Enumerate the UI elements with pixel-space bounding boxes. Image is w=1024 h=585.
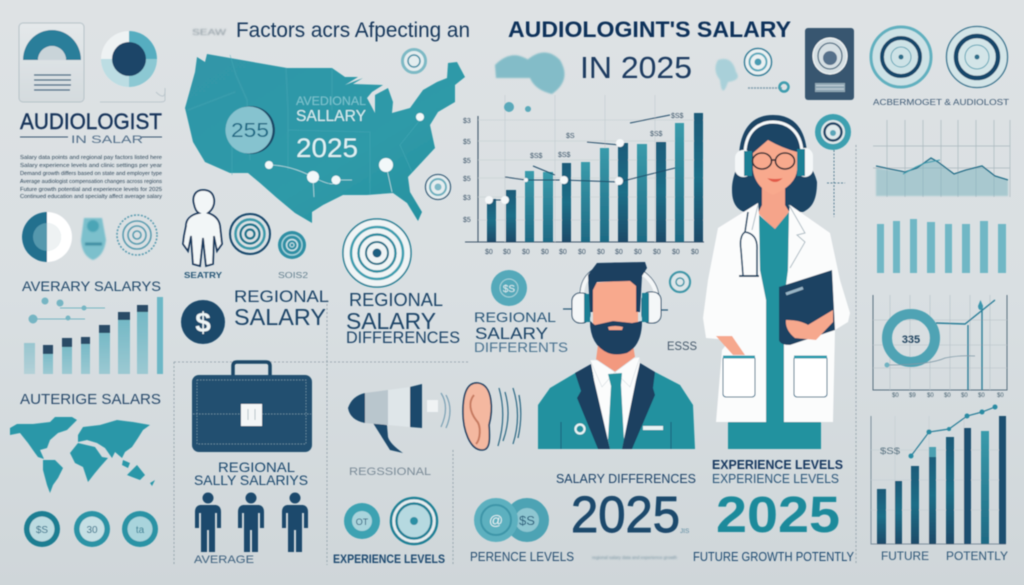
dotted panel dividers	[174, 145, 856, 565]
world map	[10, 417, 155, 493]
label: salary differences: SALARY DIFFERENCES	[556, 471, 696, 486]
bar chart: salary over time	[463, 95, 704, 256]
map circle: 255	[226, 106, 275, 154]
pockets	[723, 356, 827, 397]
label: average: AVERAGE	[194, 554, 254, 566]
lapels	[752, 205, 805, 268]
label: average salaries 2: AUTERIGE SALARS	[20, 391, 161, 408]
clipboard	[779, 270, 835, 345]
label: regional grey: REGSSIONAL	[349, 466, 431, 478]
axis labels: $0	[485, 249, 493, 256]
pocket square	[643, 426, 663, 430]
figure: female audiologist	[703, 115, 850, 449]
icon: small badge	[344, 503, 380, 539]
axis labels: $0	[615, 249, 623, 256]
label: seat: SEATRY	[184, 270, 222, 280]
forearm	[716, 336, 745, 355]
icon: ring with pin	[815, 114, 851, 217]
top blobs	[504, 102, 531, 112]
text block: body copy	[20, 155, 162, 200]
icon: megaphone	[348, 384, 450, 453]
axis labels: $3	[463, 195, 471, 202]
year: teal: 2025	[716, 486, 840, 543]
stethoscope	[739, 212, 759, 276]
axis labels: $5	[463, 217, 471, 224]
heading: regional salary differences: DIFFERENCES	[346, 328, 460, 347]
icon: faint blob	[715, 59, 738, 91]
icon: concentric target	[230, 214, 270, 254]
badge 1: $S	[36, 525, 48, 536]
glasses	[752, 153, 794, 169]
label: experience levels regular: EXPERIENCE LEVELS	[712, 471, 839, 486]
label: experience levels: EXPERIENCE LEVELS	[333, 552, 445, 566]
card: gauge	[19, 23, 84, 102]
icon: ring pair	[871, 26, 1008, 88]
axis labels: $0	[672, 249, 680, 256]
bar chart: future growth: $S$	[880, 446, 900, 456]
figure: male audiologist	[538, 262, 695, 449]
heading: regional salary: REGIONAL	[234, 287, 329, 306]
headset stems	[563, 309, 668, 310]
label: assessment audiologist: ACBERMOGET & AUDIOLOST	[873, 97, 1009, 107]
neck	[758, 188, 790, 230]
icon: donut dial	[100, 31, 165, 102]
label: potently: POTENTLY	[946, 549, 1008, 563]
title line 2: IN 2025	[580, 50, 692, 85]
year: dark: 2025	[571, 486, 680, 543]
chart with donut: $0	[961, 393, 968, 399]
shirt	[591, 357, 640, 449]
tie	[608, 373, 624, 449]
axis labels: $S$	[558, 152, 571, 159]
title	[192, 17, 791, 42]
label: future growth: FUTURE GROWTH POTENTLY	[693, 549, 854, 564]
bar strip	[877, 219, 1006, 273]
data points	[485, 139, 624, 204]
label: regional: REGIONAL	[218, 459, 295, 475]
icon: ring small	[748, 82, 788, 92]
face	[593, 280, 638, 325]
map dots	[265, 113, 424, 184]
face	[753, 140, 797, 195]
chart with donut: $0	[997, 393, 1004, 399]
map label salary: SALLARY	[296, 108, 366, 125]
headset	[572, 263, 661, 323]
axis labels: $S	[566, 133, 575, 140]
axis labels: $0	[597, 249, 605, 256]
label: experience levels truncated: PERENCE LEVELS	[470, 549, 574, 564]
icon: dollar coin: $	[195, 307, 211, 338]
icon: briefcase	[192, 362, 312, 452]
axis labels: $3	[463, 118, 471, 125]
faint caption: regional salary data and experience growth	[592, 555, 677, 560]
heading: regional salary differences: SALARY	[346, 308, 436, 334]
pin	[576, 424, 584, 434]
label: ESSS: ESSS	[667, 339, 697, 353]
badge 2: 30	[86, 525, 98, 536]
icon: ring top	[402, 50, 426, 72]
label: sois: SOIS2	[278, 271, 309, 280]
trend lines	[489, 115, 675, 200]
axis labels: $0	[559, 249, 567, 256]
axis labels: $5	[463, 176, 471, 183]
ring left	[871, 27, 931, 87]
chart with donut: 335	[902, 334, 920, 346]
neck	[596, 345, 635, 372]
icon: ring east	[426, 174, 450, 200]
text block: body copy: Average audiologist compensation changes across regions	[20, 179, 162, 185]
text block: body copy: Continued education and specialty affect average salary	[20, 194, 162, 200]
heading: regional salary differences	[346, 290, 460, 347]
decorative organic blob	[495, 52, 564, 94]
heading: regional salary differents: SALARY	[475, 324, 548, 343]
axis labels: $0	[541, 249, 549, 256]
heading: audiologist: AUDIOLOGIST	[20, 109, 162, 134]
chart with donut: $9	[909, 393, 916, 399]
icon: badge	[81, 218, 106, 260]
ring right	[946, 26, 1008, 88]
axis labels: $0	[522, 249, 530, 256]
icon: double circle: @	[489, 512, 503, 528]
label: future: FUTURE	[881, 549, 929, 563]
icon: salary badge: $S	[503, 284, 515, 295]
axis labels: $0	[653, 249, 661, 256]
axis labels: $S$	[650, 131, 663, 138]
subheading: in salary: IN SALAR	[71, 134, 143, 146]
text block: body copy: Demand growth differs based on state and employer type	[20, 171, 162, 177]
icon: teal ring	[670, 272, 690, 292]
icon: three people	[195, 492, 308, 552]
hair	[732, 115, 817, 213]
map label: AVEDIONAL	[296, 94, 366, 108]
badge row	[24, 511, 158, 547]
axis labels: $S$	[530, 153, 543, 160]
icon: person outline	[183, 190, 222, 266]
chart with donut	[873, 295, 1007, 399]
jacket	[538, 372, 695, 449]
icon: pie	[22, 212, 72, 262]
axis labels: $0	[578, 249, 586, 256]
heading: regional salary: SALARY	[234, 304, 326, 330]
icon: big concentric sound	[343, 219, 411, 287]
area chart	[873, 120, 1010, 197]
title: Factors acrs Afpecting an	[236, 19, 470, 42]
beard	[590, 321, 642, 354]
text block: body copy: Salary experience levels and clinic settings per year	[20, 163, 162, 169]
axis labels: $5	[463, 139, 471, 146]
axis labels	[463, 113, 699, 256]
icon: double circle	[474, 498, 549, 542]
icon: ear with sound waves	[463, 383, 521, 450]
device card	[805, 28, 854, 100]
bar chart: average salaries	[24, 297, 163, 374]
icon: spiral seal	[117, 215, 157, 255]
axis labels: $S$	[671, 113, 684, 120]
map of the United States	[185, 54, 465, 223]
icon: dollar coin	[181, 300, 225, 344]
heading: regional salary differents: REGIONAL	[474, 309, 556, 325]
jacket seams	[561, 422, 671, 449]
chart with donut: $0	[927, 393, 934, 399]
icon: salary badge	[491, 270, 527, 306]
panel: audiologist summary	[10, 23, 165, 547]
small label: JIS	[680, 528, 690, 535]
heading: regional salary	[234, 287, 329, 330]
chart with donut: $0	[944, 393, 951, 399]
headset	[735, 122, 813, 177]
axis labels: $0	[503, 249, 511, 256]
small tag: SEAW	[192, 28, 227, 37]
scrubs	[759, 212, 789, 400]
text block: body copy: Salary data points and regional pay factors listed here	[20, 155, 162, 161]
axis labels: $5	[463, 158, 471, 165]
icon: spiral	[278, 231, 306, 259]
smile	[769, 179, 781, 182]
label: average salaries: AVERARY SALARYS	[22, 278, 161, 294]
icon: spiral	[744, 48, 772, 76]
icon: double circle: $S	[519, 513, 535, 528]
icon: ring badge	[391, 498, 437, 544]
lapels	[575, 363, 655, 449]
shirt collar	[590, 357, 640, 387]
map circle: 255: 255	[231, 120, 269, 142]
heading: regional salary differents	[474, 309, 568, 355]
text block: body copy: Future growth potential and experience levels for 2025	[20, 187, 162, 193]
title: AUDIOLOGINT'S SALARY	[508, 17, 791, 42]
map year: 2025	[296, 133, 358, 163]
small connector icons	[29, 298, 105, 323]
icon: small badge: OT	[356, 517, 369, 527]
scrub skirt	[728, 400, 821, 449]
label: sally salaries: SALLY SALARIYS	[194, 472, 308, 488]
axis labels: $0	[691, 249, 699, 256]
chart with donut: $0	[978, 393, 985, 399]
axis labels: $0	[634, 249, 642, 256]
heading: regional salary differences: REGIONAL	[349, 290, 443, 310]
bar chart: future growth	[871, 404, 1006, 544]
bars	[487, 113, 703, 242]
badge 3: ta	[136, 525, 145, 536]
heading: regional salary differents: DIFFERENTS	[474, 339, 568, 355]
hand	[786, 310, 833, 340]
hair	[588, 262, 647, 312]
chart with donut: $0	[892, 393, 899, 399]
coat	[703, 203, 850, 422]
label: experience levels bold: EXPERIENCE LEVELS	[712, 457, 843, 472]
